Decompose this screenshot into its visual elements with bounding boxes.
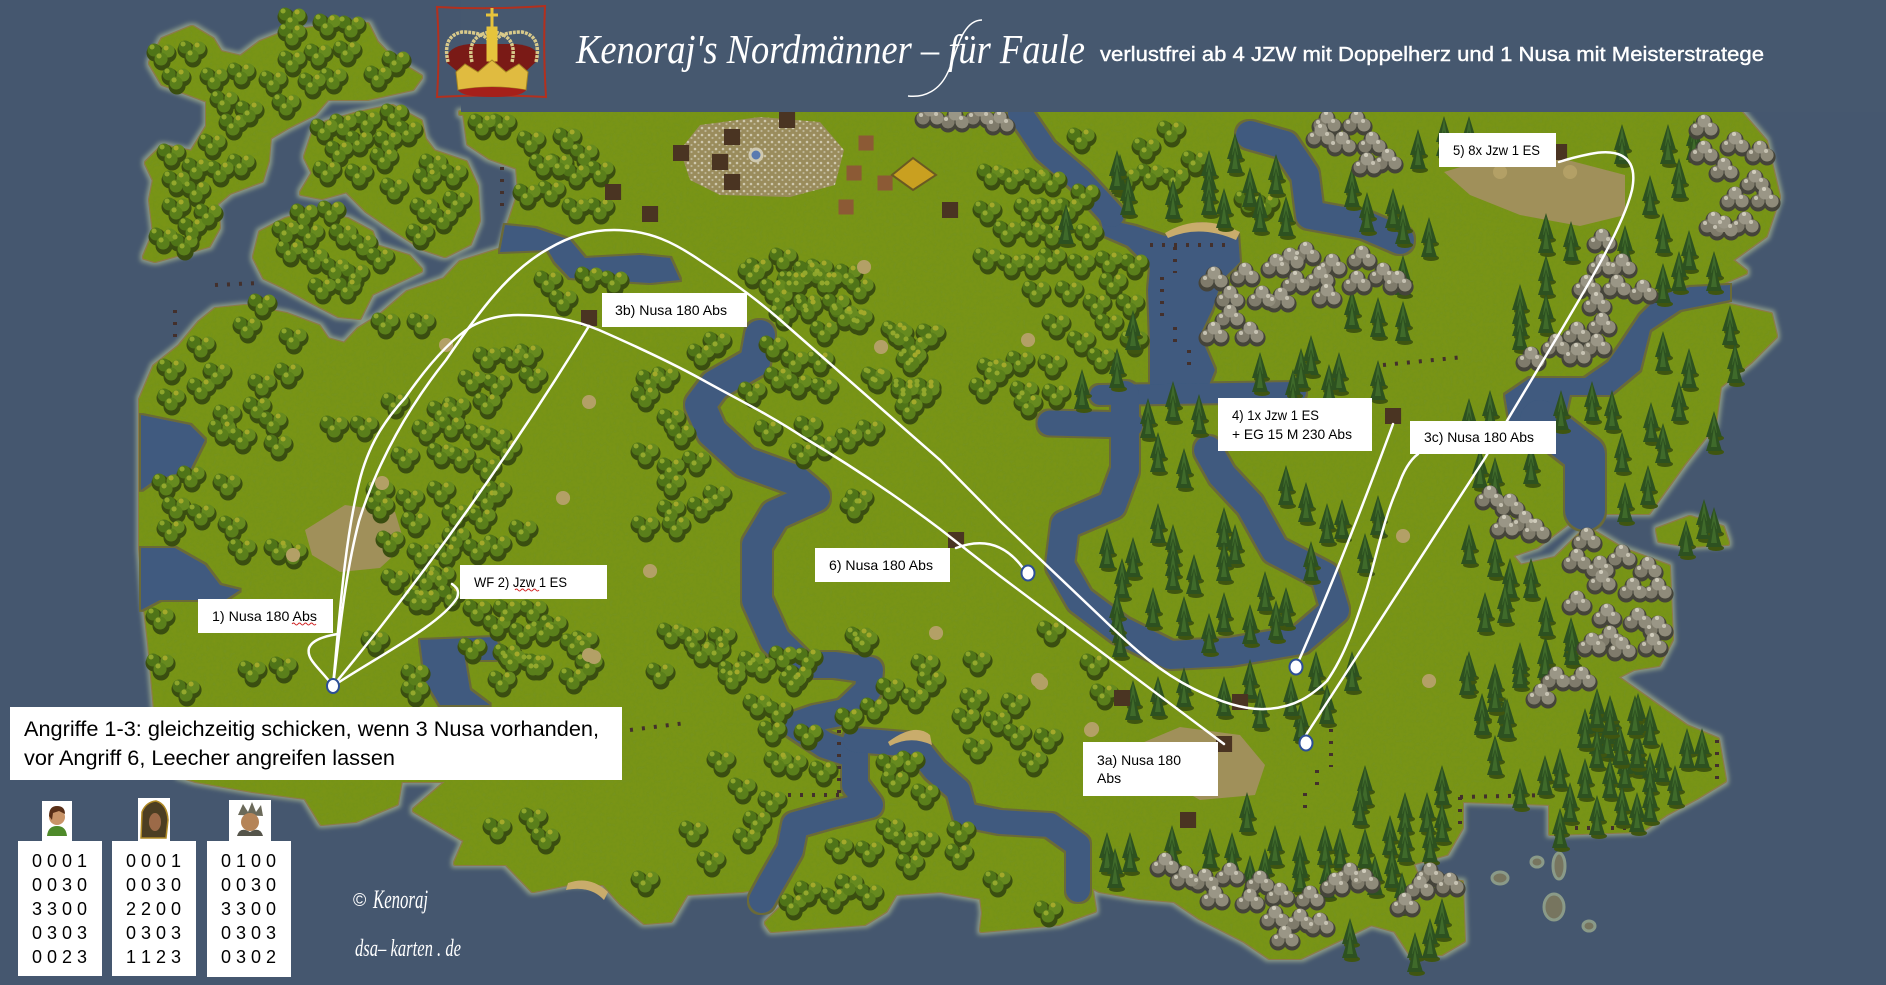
label WF 2: WF 2) Jzw 1 ES bbox=[474, 574, 567, 590]
title: Kenoraj's Nordmänner – für Faule bbox=[575, 26, 1085, 72]
callout: attack note: vor Angriff 6, Leecher angreifen lassen bbox=[24, 747, 395, 770]
branch north-east bbox=[1250, 135, 1400, 240]
velvet cap bbox=[446, 44, 538, 72]
route lines bbox=[309, 152, 1633, 744]
islet three bbox=[1553, 853, 1565, 879]
number card 1: 0 0 0 1 bbox=[32, 851, 87, 871]
marker attack 5 bbox=[1300, 736, 1312, 750]
islet four bbox=[1544, 894, 1564, 920]
number card 3: 3 3 0 0 bbox=[221, 899, 276, 919]
title flourish bbox=[908, 20, 982, 96]
islet one bbox=[1492, 872, 1508, 884]
label 4: 4) 1x Jzw 1 ES bbox=[1232, 407, 1319, 423]
icon: crown bbox=[437, 6, 546, 97]
label 1 bbox=[198, 599, 333, 633]
wheat field bbox=[892, 158, 936, 190]
clearing south-east bbox=[1130, 727, 1265, 800]
number card 2: 0 0 3 0 bbox=[126, 875, 181, 895]
number card 1: 0 0 2 3 bbox=[32, 947, 87, 967]
river north bbox=[1020, 113, 1112, 215]
inlet east bbox=[1505, 285, 1730, 440]
village plaza bbox=[680, 117, 844, 197]
clearing west bbox=[305, 505, 405, 572]
marker start west bbox=[327, 679, 339, 693]
portrait: general 1 bbox=[42, 801, 72, 841]
copyright signature: © bbox=[353, 890, 366, 910]
copyright signature: Kenoraj bbox=[372, 885, 428, 914]
rock formations bbox=[921, 106, 1772, 942]
number card 1: 0 3 0 3 bbox=[32, 923, 87, 943]
start markers bbox=[327, 566, 1312, 750]
forest: deciduous trees bbox=[151, 11, 1272, 919]
islet five bbox=[1583, 921, 1595, 931]
label 3a: 3a) Nusa 180 bbox=[1097, 752, 1181, 768]
forest: conifers bbox=[1066, 121, 1735, 951]
red frame bbox=[437, 6, 546, 97]
island: west-centre bbox=[255, 213, 420, 317]
red base bbox=[458, 87, 526, 97]
marker attack 4 bbox=[1290, 660, 1302, 674]
number card 3 bbox=[207, 841, 291, 977]
route: attack 2 bbox=[333, 584, 458, 686]
label 3a: Abs bbox=[1097, 770, 1121, 786]
label 3c bbox=[1410, 421, 1556, 454]
lake north bbox=[1100, 218, 1240, 395]
route: to camp 3b bbox=[333, 326, 589, 686]
number card 3: 0 3 0 2 bbox=[221, 947, 276, 967]
copyright signature: dsa– karten . de bbox=[355, 936, 461, 962]
camps and tufts bbox=[293, 172, 1570, 730]
beaches bbox=[566, 222, 1240, 900]
main land bbox=[141, 113, 1778, 957]
arches bbox=[447, 32, 537, 62]
copyright signature bbox=[353, 885, 461, 962]
label 1: 1) Nusa 180 Abs bbox=[212, 608, 317, 624]
river loop bbox=[1100, 392, 1296, 395]
lakes west bbox=[420, 637, 505, 705]
river system bbox=[141, 113, 1730, 900]
dirt patches and plaza bbox=[305, 117, 1625, 800]
label 3b: 3b) Nusa 180 Abs bbox=[615, 302, 727, 318]
marker attack 6 bbox=[1022, 566, 1034, 580]
portrait: general 3 bbox=[229, 800, 271, 841]
label 3a bbox=[1083, 742, 1218, 796]
label 6 bbox=[815, 548, 950, 582]
island: north-west bbox=[145, 25, 420, 260]
number card 2 bbox=[112, 841, 196, 976]
label 5: 5) 8x Jzw 1 ES bbox=[1453, 142, 1540, 158]
callout: attack note: Angriffe 1-3: gleichzeitig schicken, wenn 3 Nusa vorhanden, bbox=[24, 718, 599, 741]
label 4: + EG 15 M 230 Abs bbox=[1232, 426, 1352, 442]
subtitle: verlustfrei ab 4 JZW mit Doppelherz und 1 Nusa mit Meisterstratege bbox=[1100, 44, 1764, 66]
number card 2: 0 0 0 1 bbox=[126, 851, 181, 871]
inlet north-west bbox=[500, 225, 680, 283]
islet east bbox=[1658, 518, 1727, 545]
number card 2: 0 3 0 3 bbox=[126, 923, 181, 943]
callout: attack note bbox=[10, 707, 622, 780]
label 5 bbox=[1439, 133, 1556, 167]
town houses bbox=[846, 143, 885, 207]
number card 3: 0 0 3 0 bbox=[221, 875, 276, 895]
route: arc to 3a bbox=[333, 315, 1224, 744]
route: attack 6 bbox=[956, 543, 1027, 574]
river mid bbox=[700, 335, 815, 665]
route: attack 4 bbox=[1296, 424, 1393, 667]
soldiers lines bbox=[175, 167, 1717, 830]
clearing north-east bbox=[1444, 158, 1625, 226]
label WF 2 bbox=[460, 565, 607, 599]
label 3b bbox=[602, 293, 747, 327]
number card 1: 0 0 3 0 bbox=[32, 875, 87, 895]
route: attack 5 bbox=[1306, 152, 1633, 735]
number card 2: 2 2 0 0 bbox=[126, 899, 181, 919]
number card 3: 0 1 0 0 bbox=[221, 851, 276, 871]
label 3c: 3c) Nusa 180 Abs bbox=[1424, 429, 1534, 445]
number card 2: 1 1 2 3 bbox=[126, 947, 181, 967]
islet two bbox=[1531, 857, 1543, 867]
rock islets bbox=[1492, 853, 1595, 931]
header band bbox=[461, 0, 1886, 112]
portrait: general 2 bbox=[138, 798, 170, 841]
number card 1: 3 3 0 0 bbox=[32, 899, 87, 919]
label 4 bbox=[1218, 398, 1372, 451]
route: arc to 3c bbox=[333, 230, 1418, 709]
buildings bbox=[589, 120, 1559, 820]
number card 3: 0 3 0 3 bbox=[221, 923, 276, 943]
fountain bbox=[750, 149, 762, 161]
label 6: 6) Nusa 180 Abs bbox=[829, 557, 933, 573]
orb cross bbox=[486, 8, 498, 60]
island: north-centre bbox=[302, 107, 478, 255]
gold band bbox=[456, 60, 528, 90]
route: attack 1 bbox=[309, 634, 338, 686]
number card 1 bbox=[18, 841, 102, 976]
